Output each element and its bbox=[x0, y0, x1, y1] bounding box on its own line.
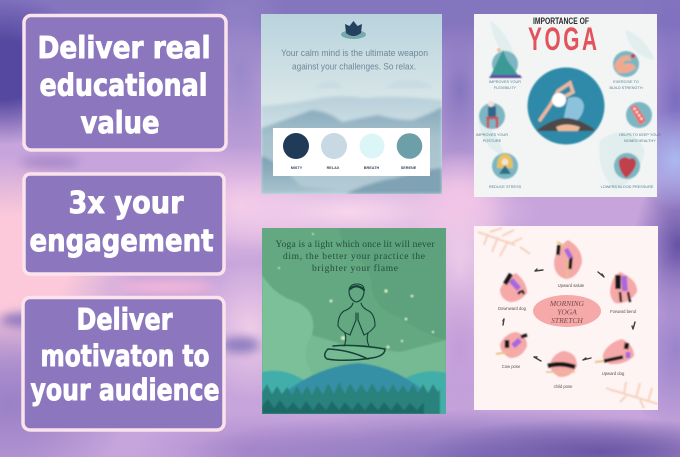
callout: deliver real educational value: Deliver real bbox=[38, 31, 210, 66]
pose labels: Forward bend bbox=[610, 309, 637, 314]
benefit labels: IMPROVES YOUR bbox=[489, 80, 521, 84]
quote text: Your calm mind is the ultimate weapon bbox=[281, 48, 428, 58]
pose: child pose bbox=[546, 351, 577, 377]
central yoga figure bbox=[528, 68, 604, 144]
callout: 3x your engagement bbox=[24, 174, 224, 274]
panel: calm mind colour palette bbox=[261, 14, 442, 194]
callout: deliver real educational value: educational bbox=[40, 68, 208, 104]
cycle arrows bbox=[503, 269, 635, 361]
callout: deliver motivation to your audience: motivaton to bbox=[40, 339, 210, 373]
benefit labels: LOWERS BLOOD PRESSURE bbox=[601, 185, 654, 189]
callout: deliver real educational value bbox=[24, 16, 226, 150]
pose labels: Cow pose bbox=[502, 364, 521, 369]
pose: cow pose bbox=[496, 332, 527, 358]
quote text: Yoga is a light which once lit will never bbox=[276, 240, 435, 250]
quote text: dim, the better your practice the bbox=[283, 252, 425, 262]
title: YOGA bbox=[528, 22, 600, 57]
palette card: BREATH bbox=[364, 166, 380, 170]
pose: forward bend bbox=[610, 272, 637, 303]
benefit labels: IMPROVES YOUR bbox=[476, 133, 508, 137]
faint leaves bbox=[478, 20, 655, 190]
quote text bbox=[281, 48, 428, 72]
panel: meditation quote bbox=[262, 228, 446, 414]
centre title: MORNING bbox=[549, 299, 585, 308]
callout: deliver motivation to your audience: Deliver bbox=[76, 302, 173, 336]
palette card: RELAX bbox=[327, 166, 340, 170]
pose labels: child pose bbox=[554, 384, 573, 389]
benefit labels: FLEXIBILITY bbox=[494, 86, 517, 90]
benefit labels: HELPS TO KEEP YOUR bbox=[619, 133, 661, 137]
benefit labels: BONES HEALTHY bbox=[624, 139, 656, 143]
palette card: MISTY bbox=[291, 166, 303, 170]
centre title bbox=[533, 295, 601, 327]
panel: morning yoga stretch bbox=[474, 226, 658, 410]
benefit icons bbox=[479, 48, 652, 179]
pose: downward dog bbox=[500, 273, 527, 302]
quote text bbox=[276, 240, 435, 274]
pose labels: Upward dog bbox=[602, 371, 625, 376]
callout: 3x your engagement: 3x your bbox=[68, 186, 184, 221]
callout: 3x your engagement: engagement bbox=[30, 224, 214, 259]
centre title: YOGA bbox=[557, 308, 577, 316]
title: IMPORTANCE OF bbox=[533, 16, 589, 26]
quote text: brighter your flame bbox=[312, 263, 398, 274]
panel: importance of yoga bbox=[474, 14, 661, 197]
centre title: STRETCH bbox=[551, 316, 583, 325]
benefit labels: EXERCISE TO bbox=[613, 80, 639, 84]
callout: deliver motivation to your audience: your audience bbox=[30, 373, 220, 407]
icon: lotus bbox=[341, 21, 366, 39]
palette card: SERENE bbox=[401, 166, 417, 170]
meditating figure bbox=[325, 284, 385, 360]
callout: deliver real educational value: value bbox=[80, 106, 160, 141]
pose labels bbox=[498, 283, 637, 389]
pose labels: Upward salute bbox=[558, 283, 585, 288]
callout: deliver motivation to your audience bbox=[23, 298, 224, 430]
benefit labels: POSTURE bbox=[483, 139, 502, 143]
quote text: against your challenges. So relax. bbox=[292, 62, 416, 72]
pose: upward dog bbox=[595, 339, 634, 364]
background shapes bbox=[262, 228, 446, 414]
mountain landscape bbox=[261, 80, 442, 194]
palette card bbox=[273, 128, 430, 176]
corner leaves bbox=[478, 228, 658, 408]
pose: upward salute bbox=[554, 240, 582, 279]
benefit labels bbox=[476, 80, 661, 189]
pose labels: Downward dog bbox=[498, 306, 527, 311]
benefit labels: REDUCE STRESS bbox=[489, 185, 522, 189]
benefit labels: BUILD STRENGTH bbox=[609, 86, 643, 90]
